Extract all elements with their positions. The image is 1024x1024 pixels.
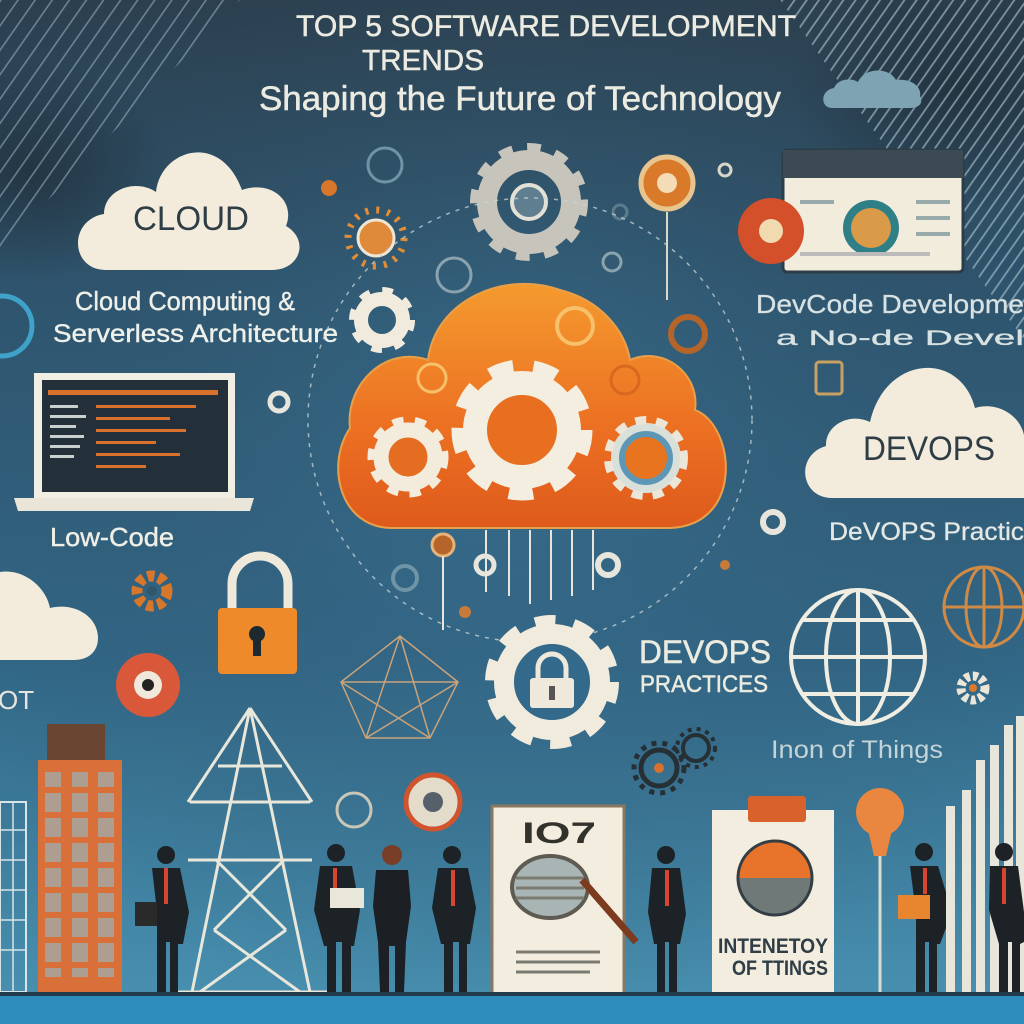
title: TOP 5 SOFTWARE DEVELOPMENT bbox=[296, 10, 796, 43]
icon: radio tower bbox=[170, 708, 330, 992]
text: devops practices center: DEVOPS bbox=[639, 634, 771, 670]
icon: orange flower bbox=[137, 576, 167, 606]
title: TRENDS bbox=[362, 45, 484, 77]
icon: lightbulb bbox=[856, 788, 904, 992]
panel: cloud label bbox=[78, 152, 300, 270]
panel: devops cloud: DEVOPS bbox=[863, 430, 995, 468]
dashed orbit bbox=[308, 198, 752, 642]
text: devops practices right: DeVOPS Practic bbox=[829, 518, 1024, 546]
building left bbox=[0, 802, 26, 992]
text: internet of things: Inon of Things bbox=[771, 736, 943, 764]
text: cloud computing: Serverless Architecture bbox=[53, 320, 338, 348]
icon: small rings bbox=[270, 148, 842, 618]
icon: small dark gears bbox=[634, 729, 715, 793]
person 1 bbox=[135, 846, 189, 992]
panel: report document bbox=[492, 806, 636, 994]
person 7 bbox=[989, 843, 1024, 992]
panel: laptop bbox=[14, 373, 254, 511]
text: cloud computing: Cloud Computing & bbox=[75, 286, 295, 316]
text: devops practices center: PRACTICES bbox=[640, 671, 768, 698]
connector lines below cloud bbox=[443, 530, 593, 630]
panel: clipboard iot bbox=[712, 796, 834, 994]
text: cloud computing bbox=[53, 286, 338, 348]
icon: globe bbox=[791, 590, 925, 724]
title: Shaping the Future of Technology bbox=[259, 80, 781, 118]
icon: small cloud top right bbox=[823, 70, 921, 108]
icon: large gray gear top bbox=[477, 150, 581, 254]
icon: white flower bbox=[961, 676, 985, 700]
icon: orange globe right bbox=[944, 567, 1024, 647]
icon: orange medal bbox=[641, 157, 693, 300]
icon: medium badges bbox=[337, 775, 460, 829]
bar chart right bbox=[946, 716, 1024, 992]
person 3 bbox=[373, 845, 411, 992]
floor strip bbox=[0, 992, 1024, 1024]
panel: left cloud bbox=[0, 571, 98, 660]
icon: red badge bbox=[116, 653, 180, 717]
icon: right gear bbox=[608, 420, 684, 496]
panel: clipboard iot: OF TTINGS bbox=[732, 957, 828, 980]
panel: report document: IO7 bbox=[522, 817, 596, 850]
icon: white gear left bbox=[354, 292, 410, 348]
icon: lock gear bbox=[492, 622, 612, 742]
panel: browser window bbox=[738, 150, 963, 272]
person 6 bbox=[898, 843, 952, 992]
icon: sun gear bbox=[348, 210, 404, 266]
icon: wire polyhedron bbox=[341, 636, 458, 738]
icon: center gear bbox=[459, 367, 585, 493]
panel: clipboard iot: INTENETOY bbox=[718, 935, 828, 958]
icon: left gear bbox=[372, 421, 444, 493]
building orange bbox=[38, 724, 122, 992]
person 4 bbox=[432, 846, 476, 992]
panel: central orange cloud bbox=[338, 284, 726, 528]
icon: blue ring left bbox=[0, 296, 32, 356]
text: low-code development: a No-de Devel bbox=[776, 327, 1024, 350]
title bbox=[259, 10, 796, 118]
panel: cloud label: CLOUD bbox=[133, 200, 249, 238]
text: low-code development bbox=[756, 289, 1024, 350]
text: devops practices center bbox=[639, 634, 771, 698]
person 2 bbox=[314, 844, 364, 992]
text: low-code development: DevCode Developme bbox=[756, 289, 1024, 319]
icon: padlock bbox=[218, 556, 297, 674]
panel: devops cloud bbox=[805, 368, 1024, 498]
person 5 bbox=[648, 846, 686, 992]
text: low-code: Low-Code bbox=[50, 522, 174, 552]
